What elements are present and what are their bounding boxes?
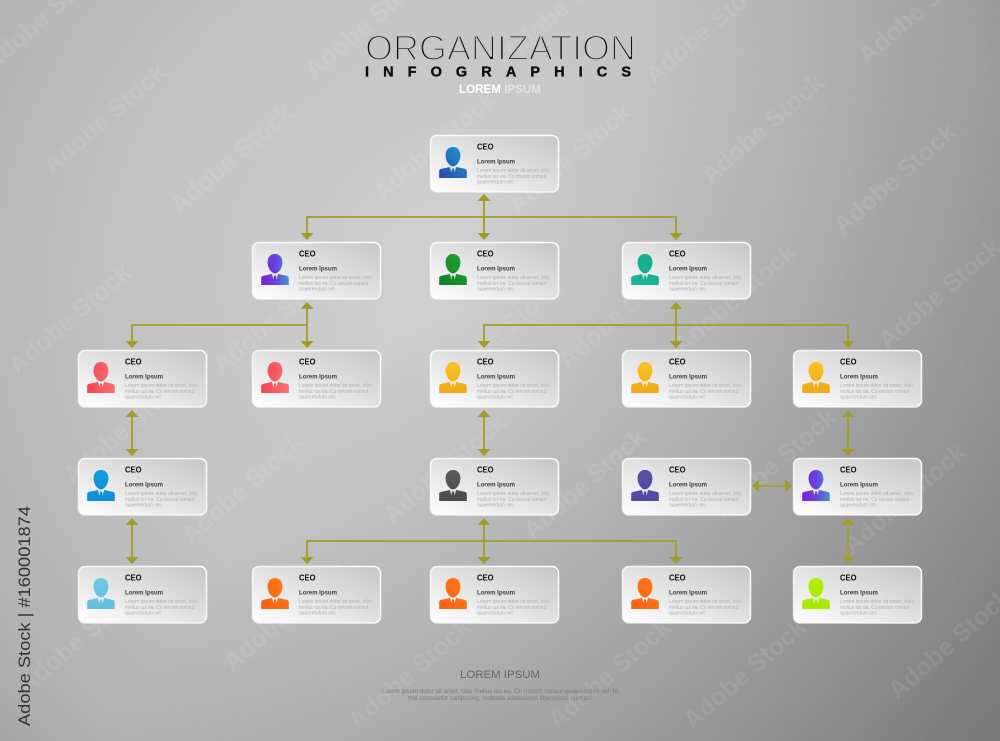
title — [365, 29, 636, 96]
card text: quaerendum vel. — [840, 394, 877, 400]
card text: Lorem ipsum dolor sit amet, cibo — [840, 491, 913, 497]
card text — [477, 248, 550, 292]
watermark pattern: Adobe Stock — [838, 438, 972, 560]
card: row 4 column 5 — [794, 458, 922, 515]
icon: person cyan — [87, 470, 115, 501]
title: LOREM IPSUM — [459, 82, 541, 96]
icon: person orange — [261, 578, 289, 609]
card: row 2 centre — [430, 242, 558, 299]
watermark pattern: Adobe Stock — [708, 403, 842, 525]
card text: quaerendum vel. — [125, 394, 162, 400]
card text: Lorem ipsum dolor sit amet, cibo — [477, 168, 550, 174]
card text: Lorem ipsum dolor sit amet, cibo — [477, 383, 550, 389]
card text: quaerendum vel. — [299, 286, 336, 292]
card text: Lorem Ipsum — [477, 374, 515, 380]
card text: melius ius ea. Cu novum consul — [299, 281, 368, 287]
card text — [125, 572, 198, 616]
arrows: left branch to third row — [126, 302, 314, 348]
card: row 3 column 5 — [794, 350, 922, 407]
card text: CEO — [299, 248, 316, 258]
card text — [299, 572, 372, 616]
icon: person green — [439, 254, 467, 285]
card: row 5 column 5 — [794, 566, 922, 623]
card text: quaerendum vel. — [669, 286, 706, 292]
card text: CEO — [125, 572, 142, 582]
watermark pattern: Adobe Stock — [668, 238, 802, 360]
card text — [669, 356, 742, 400]
card: row 3 column 1 — [78, 350, 206, 407]
card: row 4 column 1 — [78, 458, 206, 515]
card text — [299, 356, 372, 400]
watermark pattern: Adobe Stock — [503, 98, 637, 220]
card text: Lorem Ipsum — [477, 158, 515, 166]
card text: quaerendum vel. — [299, 610, 336, 616]
card text: Lorem Ipsum — [669, 374, 707, 380]
card text — [840, 464, 913, 508]
card text: melius ius ea. Cu novum consul — [125, 497, 194, 503]
icon: person purple — [802, 470, 830, 501]
watermark pattern: Adobe Stock — [543, 613, 677, 735]
stock id label: Adobe Stock | #160001874 — [16, 506, 34, 726]
watermark pattern: Adobe Stock — [368, 85, 502, 207]
card text: Lorem ipsum dolor sit amet, cibo — [669, 275, 742, 281]
card: row 5 column 4 — [622, 566, 750, 623]
arrows: CEO to second row — [300, 194, 682, 240]
card: row 3 column 4 — [622, 350, 750, 407]
watermark pattern: Adobe Stock — [343, 613, 477, 735]
card text: quaerendum vel. — [299, 394, 336, 400]
card: row 3 column 2 — [252, 350, 380, 407]
card text: quaerendum vel. — [125, 502, 162, 508]
card text: Lorem ipsum dolor sit amet, cibo — [669, 383, 742, 389]
card text: CEO — [477, 572, 494, 582]
card text: quaerendum vel. — [477, 394, 514, 400]
card: row 5 column 3 — [430, 566, 558, 623]
card text — [125, 464, 198, 508]
card text: Lorem Ipsum — [840, 482, 878, 488]
card text: CEO — [669, 572, 686, 582]
card text: CEO — [840, 464, 857, 474]
card text: melius ius ea. Cu novum consul — [477, 389, 546, 395]
card text: Lorem ipsum dolor sit amet, cibo — [125, 383, 198, 389]
footer text: LOREM IPSUM — [460, 669, 540, 681]
card text: CEO — [299, 356, 316, 366]
card text — [125, 356, 198, 400]
card text — [477, 464, 550, 508]
watermark pattern: Adobe Stock — [828, 118, 962, 240]
card text: Lorem Ipsum — [669, 266, 707, 272]
icon: person indigo — [631, 470, 659, 501]
card text: CEO — [125, 356, 142, 366]
card: row 2 right — [622, 242, 750, 299]
card text: melius ius ea. Cu novum consul — [477, 497, 546, 503]
arrow: horizontal link — [752, 480, 792, 492]
watermark pattern: Adobe Stock — [165, 98, 299, 220]
card text: Lorem ipsum dolor sit amet, cibo — [669, 491, 742, 497]
card: row 5 column 1 — [78, 566, 206, 623]
card text: quaerendum vel. — [840, 610, 877, 616]
icon: person red — [261, 362, 289, 393]
card text: Lorem ipsum dolor sit amet, cibo — [125, 599, 198, 605]
icon: person lime — [802, 578, 830, 609]
card text: CEO — [477, 248, 494, 258]
card text: CEO — [477, 356, 494, 366]
icon: person yellow — [439, 362, 467, 393]
card text: Lorem Ipsum — [299, 266, 337, 272]
card text: Lorem Ipsum — [299, 374, 337, 380]
card text: quaerendum vel. — [669, 394, 706, 400]
watermark pattern: Adobe Stock — [38, 58, 172, 180]
card text: CEO — [477, 464, 494, 474]
card text: Lorem ipsum dolor sit amet, cibo — [477, 599, 550, 605]
watermark pattern: Adobe Stock — [3, 258, 137, 380]
card text: Lorem ipsum dolor sit amet, cibo — [299, 599, 372, 605]
watermark pattern: Adobe Stock — [176, 428, 310, 550]
arrows: third to fourth row — [126, 410, 854, 456]
arrows: fourth to fifth row — [126, 518, 854, 564]
card text: Lorem Ipsum — [669, 590, 707, 596]
connectors and arrows — [126, 194, 854, 564]
card text: Lorem Ipsum — [840, 374, 878, 380]
watermark pattern: Adobe Stock — [378, 408, 512, 530]
card text: Lorem ipsum dolor sit amet, cibo — [840, 599, 913, 605]
watermark pattern: Adobe Stock — [208, 258, 342, 380]
card text: melius ius ea. Cu novum consul — [477, 605, 546, 611]
card: row 5 column 2 — [252, 566, 380, 623]
card text: melius ius ea. Cu novum consul — [299, 605, 368, 611]
card text — [840, 572, 913, 616]
footer text: Lorem ipsum dolor sit amet, cibo melius ius ea. Cu novum consul quaerendum vel. Id — [382, 689, 618, 695]
card text: CEO — [669, 356, 686, 366]
card text: quaerendum vel. — [669, 610, 706, 616]
card text: Lorem ipsum dolor sit amet, cibo — [669, 599, 742, 605]
card text — [669, 464, 742, 508]
card: top CEO — [430, 136, 558, 192]
card text: Lorem Ipsum — [125, 590, 163, 596]
card text: CEO — [669, 248, 686, 258]
card text: Lorem Ipsum — [299, 590, 337, 596]
card: row 4 column 3 — [430, 458, 558, 515]
footer text: mel consetetur sadipscing, molestie adolescens liberavisse cum ad. — [408, 696, 593, 702]
card text: melius ius ea. Cu novum consul — [125, 605, 194, 611]
title: ORGANIZATION — [365, 29, 636, 68]
card: row 3 column 3 — [430, 350, 558, 407]
card text: Lorem Ipsum — [477, 590, 515, 596]
card text: melius ius ea. Cu novum consul — [669, 497, 738, 503]
card text — [840, 356, 913, 400]
card text — [477, 572, 550, 616]
watermark pattern: Adobe Stock — [13, 578, 147, 700]
card text: Lorem ipsum dolor sit amet, cibo — [299, 383, 372, 389]
icon: person orange — [631, 578, 659, 609]
icon: person purple — [261, 254, 289, 285]
card text — [299, 248, 372, 292]
card text: quaerendum vel. — [477, 286, 514, 292]
card text: CEO — [477, 142, 494, 152]
icon: person grey — [439, 470, 467, 501]
card text: melius ius ea. Cu novum consul — [840, 605, 909, 611]
card text: Lorem ipsum dolor sit amet, cibo — [840, 383, 913, 389]
card text: melius ius ea. Cu novum consul — [669, 389, 738, 395]
card text: Lorem Ipsum — [125, 482, 163, 488]
card text: Lorem ipsum dolor sit amet, cibo — [477, 275, 550, 281]
card text: Lorem Ipsum — [477, 266, 515, 272]
card text: CEO — [840, 356, 857, 366]
card text: quaerendum vel. — [125, 610, 162, 616]
card text: quaerendum vel. — [477, 610, 514, 616]
card text: Lorem Ipsum — [840, 590, 878, 596]
card text — [669, 572, 742, 616]
watermark pattern: Adobe Stock — [553, 253, 687, 375]
watermark pattern: Adobe Stock — [218, 555, 352, 677]
watermark pattern: Adobe Stock — [58, 368, 192, 490]
watermark pattern: Adobe Stock — [433, 273, 567, 395]
card text: quaerendum vel. — [840, 502, 877, 508]
card: row 2 left — [252, 242, 380, 299]
card text: CEO — [669, 464, 686, 474]
watermark pattern: Adobe Stock — [678, 613, 812, 735]
card text — [477, 356, 550, 400]
card text: quaerendum vel. — [477, 502, 514, 508]
icon: person yellow — [802, 362, 830, 393]
card text: CEO — [299, 572, 316, 582]
card text: Lorem Ipsum — [669, 482, 707, 488]
card text: Lorem Ipsum — [125, 374, 163, 380]
icon: person red — [87, 362, 115, 393]
watermark pattern: Adobe Stock — [696, 68, 830, 190]
card: row 4 column 4 — [622, 458, 750, 515]
card text: melius ius ea. Cu novum consul — [477, 281, 546, 287]
card text — [477, 142, 550, 186]
card text: Lorem Ipsum — [477, 482, 515, 488]
card text: melius ius ea. Cu novum consul — [477, 174, 546, 180]
card text: Lorem ipsum dolor sit amet, cibo — [299, 275, 372, 281]
card text: CEO — [840, 572, 857, 582]
icon: person teal — [631, 254, 659, 285]
card text: melius ius ea. Cu novum consul — [125, 389, 194, 395]
arrows: right branch to third row — [478, 302, 854, 348]
card text: melius ius ea. Cu novum consul — [669, 281, 738, 287]
watermark pattern: Adobe Stock — [518, 423, 652, 545]
icon: person yellow — [631, 362, 659, 393]
icon: person blue — [439, 147, 467, 178]
card text: CEO — [125, 464, 142, 474]
card text: quaerendum vel. — [669, 502, 706, 508]
card text: melius ius ea. Cu novum consul — [669, 605, 738, 611]
card text: Lorem ipsum dolor sit amet, cibo — [125, 491, 198, 497]
card text — [669, 248, 742, 292]
footer text — [382, 669, 618, 702]
icon: person orange — [439, 578, 467, 609]
card text: quaerendum vel. — [477, 180, 514, 186]
card text: melius ius ea. Cu novum consul — [840, 497, 909, 503]
card text: Lorem ipsum dolor sit amet, cibo — [477, 491, 550, 497]
title: INFOGRAPHICS — [365, 64, 631, 80]
icon: person sky blue — [87, 578, 115, 609]
card text: melius ius ea. Cu novum consul — [840, 389, 909, 395]
card text: melius ius ea. Cu novum consul — [299, 389, 368, 395]
